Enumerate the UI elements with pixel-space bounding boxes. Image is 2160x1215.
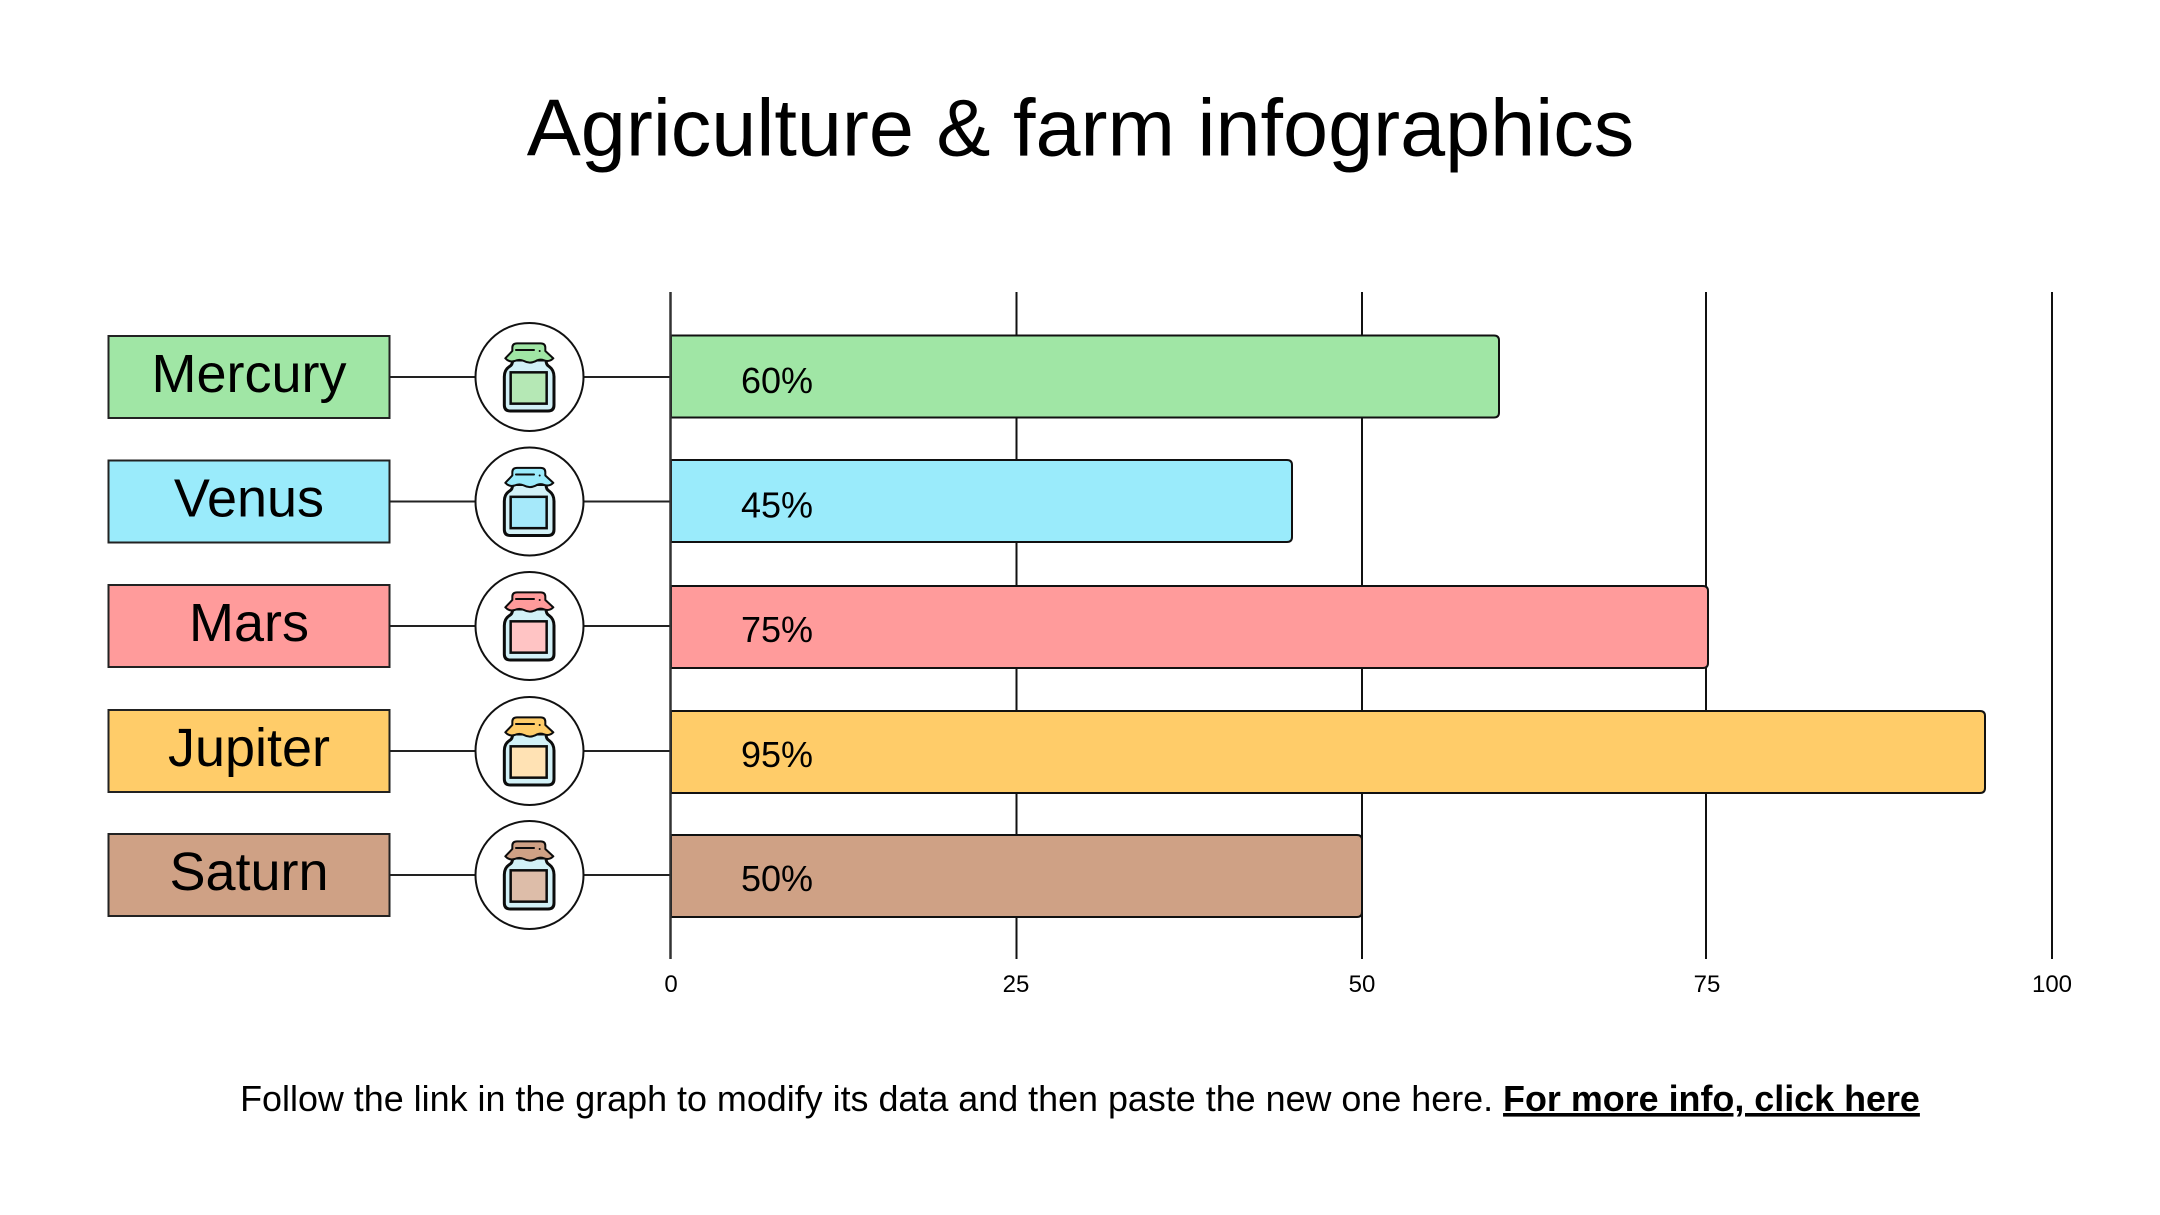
icon: Venus jar — [476, 448, 584, 556]
axis labels: 25 — [1003, 971, 1029, 998]
axis labels: 75 — [1694, 971, 1720, 998]
label: Mercury: Mercury — [151, 344, 347, 404]
axis labels — [664, 971, 2072, 998]
bar: Mercury 60% — [671, 336, 1499, 418]
row: Mercury — [108, 323, 1499, 431]
axis labels: 50 — [1349, 971, 1375, 998]
icon: Mars jar — [476, 572, 584, 680]
row: Saturn — [108, 821, 1362, 929]
chart axis grid — [1016, 292, 2052, 959]
row: Jupiter — [108, 697, 1985, 805]
bar: Jupiter 95% — [671, 711, 1985, 793]
bar: Saturn 50%: 50% — [741, 858, 813, 899]
bar: Jupiter 95%: 95% — [741, 734, 813, 775]
icon: Jupiter jar — [476, 697, 584, 805]
label: Mars: Mars — [189, 593, 309, 653]
bar: Mercury 60%: 60% — [741, 360, 813, 401]
label: Mercury — [108, 336, 390, 418]
label: Jupiter: Jupiter — [168, 718, 330, 778]
row: Venus — [108, 448, 1292, 556]
label: Jupiter — [108, 710, 390, 792]
zero axis line — [669, 292, 672, 959]
bar: Mars 75% — [671, 586, 1708, 668]
label: Venus — [108, 460, 390, 542]
axis labels: 0 — [664, 971, 678, 998]
row: Mars — [108, 572, 1708, 680]
bar: Saturn 50% — [671, 835, 1362, 917]
axis labels: 100 — [2032, 971, 2072, 998]
icon: Mercury jar — [476, 323, 584, 431]
title: Agriculture & farm infographics — [527, 84, 1634, 174]
bar: Mars 75%: 75% — [741, 609, 813, 650]
icon: Saturn jar — [476, 821, 584, 929]
bar: Venus 45% — [671, 460, 1292, 542]
bar: Venus 45%: 45% — [741, 484, 813, 526]
footer note: Follow the link in the graph to modify its data and then paste the new one here. For more info, click here — [240, 1079, 1920, 1119]
label: Saturn: Saturn — [169, 842, 329, 902]
label: Venus: Venus — [174, 468, 324, 528]
label: Saturn — [108, 834, 390, 916]
label: Mars — [108, 585, 390, 667]
